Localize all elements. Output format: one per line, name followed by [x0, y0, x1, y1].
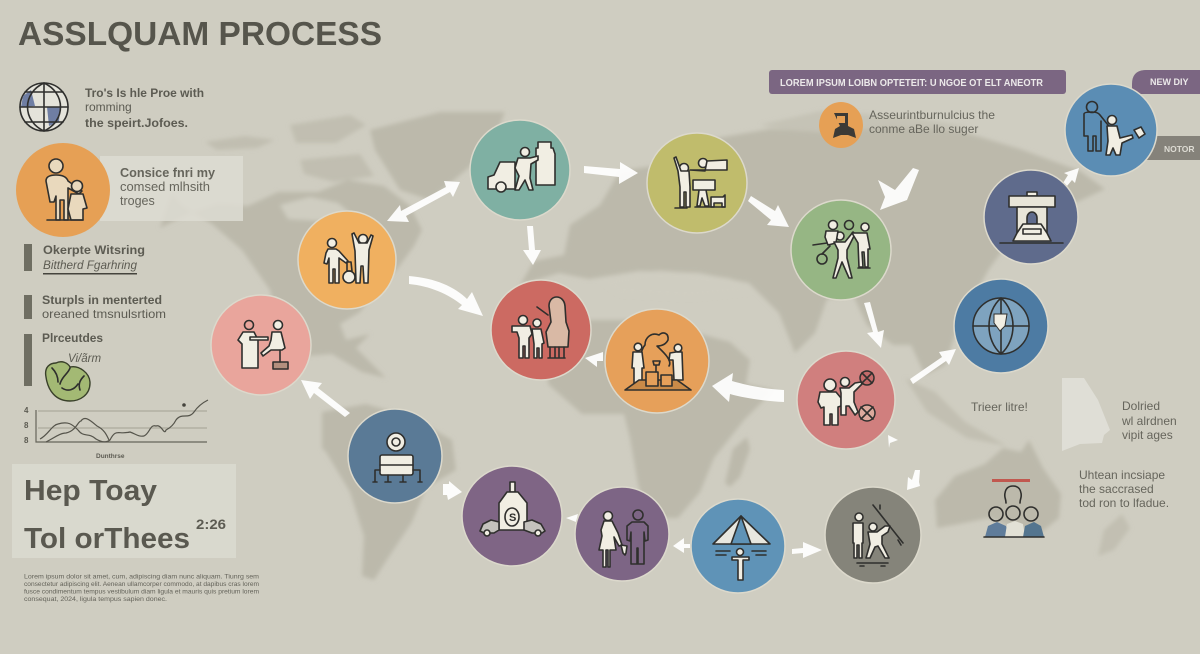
step: red figures	[491, 280, 591, 380]
list item 3 with cabbage icon: Vi/ãrm	[68, 353, 101, 365]
step: blue parasol	[691, 499, 785, 593]
list item 3 with cabbage icon	[24, 331, 103, 401]
world map background	[160, 111, 1130, 580]
line chart: Dunthrse	[96, 453, 125, 460]
title: ASSLQUAM PROCESS	[18, 15, 382, 52]
arrow: 12 to 13	[443, 481, 462, 500]
note with orange icon: Asseurintburnulcius the	[869, 108, 995, 122]
step: blue adult and child	[1065, 84, 1157, 176]
intro text: the speirt.Jofoes.	[85, 116, 188, 130]
arrow: 1 to 7	[523, 226, 541, 265]
note with orange icon: conme aBe llo suger	[869, 122, 978, 136]
list item 1: Okerpte Witsring	[43, 243, 145, 257]
step: navy machine	[984, 170, 1078, 264]
step: teal truck	[470, 120, 570, 220]
panel: orange callout	[16, 143, 243, 237]
tag: notor: NOTOR	[1164, 144, 1195, 154]
step: blue globe	[954, 279, 1048, 373]
intro text: romming	[85, 100, 132, 114]
note: urban: Uhtean incsiape	[1079, 468, 1165, 482]
note: urban: the saccrased	[1079, 482, 1154, 496]
line chart	[24, 400, 208, 460]
arrows between steps	[301, 162, 1079, 558]
list item 2	[24, 293, 166, 321]
fine print: Lorem ipsum dolor sit amet, cum, adipiscing diam nunc aliquam. Tiunrg sem	[24, 574, 259, 580]
panel: help today: Tol orThees	[24, 523, 190, 555]
arrow: 6 to 7	[409, 276, 483, 316]
list item 3 with cabbage icon: Plrceutdes	[42, 331, 103, 345]
arrow: 14 to 13	[566, 514, 578, 522]
panel: help today	[12, 464, 236, 558]
top banner	[769, 70, 1066, 94]
step: pink workbench	[211, 295, 311, 395]
step: green figures	[791, 200, 891, 300]
arrow: 3 to navy (flared)	[878, 168, 919, 210]
arrow: 15 to 16	[792, 542, 822, 558]
step: yellow-green figures	[647, 133, 747, 233]
step: gray figures	[825, 487, 921, 583]
step: slate machine	[348, 409, 442, 503]
callout text: Consice fnri my	[120, 166, 215, 180]
icon: adult and child	[46, 159, 87, 220]
icon: orange machine	[819, 102, 863, 148]
fine print: fusce condimentum tempus vestibulum diam ligula et mauris quis pretium lorem	[24, 588, 259, 596]
fine print: consequat, 2024, ligula tempus sapien donec.	[24, 596, 167, 603]
arrow: 8 to 7	[585, 352, 603, 367]
line chart: 4	[24, 406, 29, 415]
note: trieer litre: Trieer litre!	[971, 400, 1028, 414]
note with orange icon	[819, 102, 995, 148]
step: purple couple	[575, 487, 669, 581]
note: urban: tod ron to lfadue.	[1079, 496, 1169, 510]
icon: cabbage	[46, 362, 90, 401]
step: orange figures	[298, 211, 396, 309]
paper shape	[1062, 378, 1110, 451]
fine print: consectetur adipiscing elit. Aenean ullamcorper commodo, at dapibus cras lorem	[24, 581, 259, 588]
step: purple bottle and cars: S	[509, 512, 516, 524]
list item 2: Sturpls in menterted	[42, 293, 162, 307]
arrow: 16 upward	[907, 470, 920, 490]
arrow: 12 to 9	[301, 380, 350, 417]
icon: globe	[20, 83, 68, 131]
top banner: LOREM IPSUM LOIBN OPTETEIT: U NGOE OT ELT ANEOTR	[780, 77, 1043, 89]
step: orange digging scene	[605, 309, 709, 413]
list item 2: oreaned tmsnulsrtiom	[42, 307, 166, 321]
list item 1	[24, 243, 145, 274]
tag: new day	[1132, 70, 1200, 94]
callout text: troges	[120, 194, 155, 208]
arrow: 10 to 8	[712, 373, 784, 402]
tag: notor	[1140, 136, 1200, 160]
arrow: 6 to 1	[387, 181, 460, 222]
icon: group of three people	[984, 479, 1044, 537]
note: dotted: vipit ages	[1122, 428, 1173, 442]
note: dotted: wl alrdnen	[1121, 414, 1177, 428]
note: dotted: Dolried	[1122, 399, 1160, 413]
arrow: 2 to 3	[748, 196, 789, 227]
step: purple bottle and cars	[462, 466, 562, 566]
intro text: Tro's Is hle Proe with	[85, 86, 204, 100]
line chart: 8	[24, 421, 29, 430]
step: rose adult and wheels	[797, 351, 895, 449]
intro block with globe icon	[20, 83, 204, 131]
arrow: 10 to 11	[910, 349, 956, 384]
arrow: small tip near rose circle	[888, 435, 898, 448]
panel: help today: Hep Toay	[24, 475, 157, 507]
line chart: 8	[24, 436, 29, 445]
arrow: 1 to 2	[584, 162, 638, 184]
arrow: 3 to 10	[864, 302, 884, 348]
arrow: 15 to 14	[673, 538, 690, 553]
panel: help today: 2:26	[196, 517, 227, 532]
list item 1: Bittherd Fgarhring	[43, 258, 137, 272]
arrow: navy to blue	[1063, 168, 1079, 186]
tag: new day: NEW DIY	[1150, 77, 1189, 87]
callout text: comsed mlhsith	[120, 180, 210, 194]
